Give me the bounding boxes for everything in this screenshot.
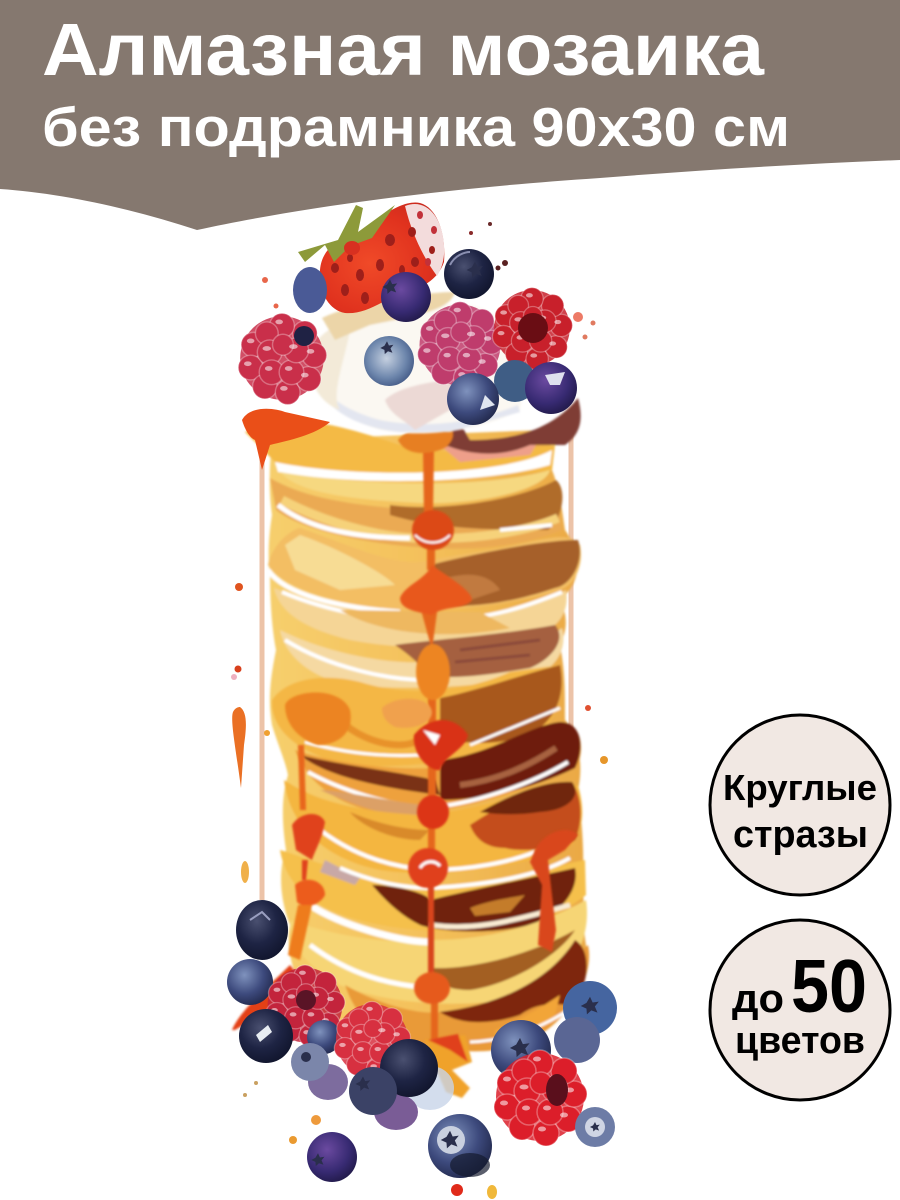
blueberry: small with shadow (291, 1043, 348, 1100)
syrup right drip (530, 830, 578, 952)
raspberry: left (238, 313, 327, 405)
blueberry: in left raspberry (294, 326, 314, 346)
blueberry: bottom left single (307, 1132, 357, 1182)
syrup central drip (398, 424, 472, 1040)
top brown syrup (445, 398, 581, 454)
layer 7 (295, 722, 581, 820)
blueberry: dark slate (447, 373, 499, 425)
badge: up to 50 colours: до (732, 977, 784, 1021)
blueberry: bottom left tall (236, 900, 288, 960)
layer 6 (272, 665, 562, 766)
blueberry: small (307, 1020, 341, 1054)
blueberry: left of strawberry (293, 267, 327, 313)
paint splatter dots (231, 222, 608, 1199)
subtitle: без подрамника 90х30 см (42, 96, 790, 158)
syrup left drip (288, 745, 325, 960)
layer 2 (270, 478, 562, 549)
layer 4 (274, 588, 567, 647)
strawberry (298, 203, 444, 313)
bottom syrup splash (232, 965, 472, 1098)
badge: round rhinestones (710, 715, 890, 895)
blueberry: small lower right (575, 1107, 615, 1147)
badge: round rhinestones: Круглые (723, 767, 877, 808)
blueberry: teal (494, 360, 536, 402)
blueberry: cream center (364, 336, 414, 386)
blueberry: right low (554, 1017, 600, 1063)
red syrup on left (242, 409, 330, 470)
layer 3 (268, 528, 581, 612)
layer 10 (290, 900, 587, 1004)
header banner (0, 0, 900, 230)
badge: up to 50 colours: цветов (735, 1020, 865, 1062)
pancake illustration (227, 203, 617, 1199)
pancake stack (245, 398, 589, 1051)
blueberry: black (239, 1009, 293, 1063)
blueberry: center bottom lower (349, 1067, 397, 1115)
syrup side streaks (262, 430, 571, 900)
layer 9 (280, 850, 586, 931)
blueberry: right high (563, 981, 617, 1035)
badge: up to 50 colours (710, 920, 890, 1100)
blueberry: large bottom (428, 1114, 492, 1178)
title: Алмазная мозаика (42, 8, 765, 91)
raspberry: bottom left (266, 965, 345, 1047)
badge: up to 50 colours: 50 (791, 944, 867, 1028)
badge: round rhinestones: стразы (733, 814, 868, 856)
blueberry: bottom left lower (227, 959, 273, 1005)
raspberry: middle (418, 302, 503, 390)
syrup blobs (285, 692, 432, 745)
blueberry: right (491, 1020, 551, 1080)
blueberry: purple (525, 362, 577, 414)
whipped cream (310, 292, 523, 433)
blueberry: under strawberry (381, 272, 431, 322)
raspberry: bottom center (334, 1001, 411, 1080)
raspberry: bottom right (494, 1050, 587, 1146)
blueberry: center bottom (374, 1039, 454, 1130)
stack silhouette (269, 430, 586, 1049)
raspberry: right (492, 288, 572, 370)
layer 1: top pancake (245, 421, 555, 503)
layer 8 (284, 780, 582, 873)
layer 11 (345, 940, 589, 1051)
blueberry: dark right (444, 249, 494, 299)
layer 5 (280, 625, 563, 688)
